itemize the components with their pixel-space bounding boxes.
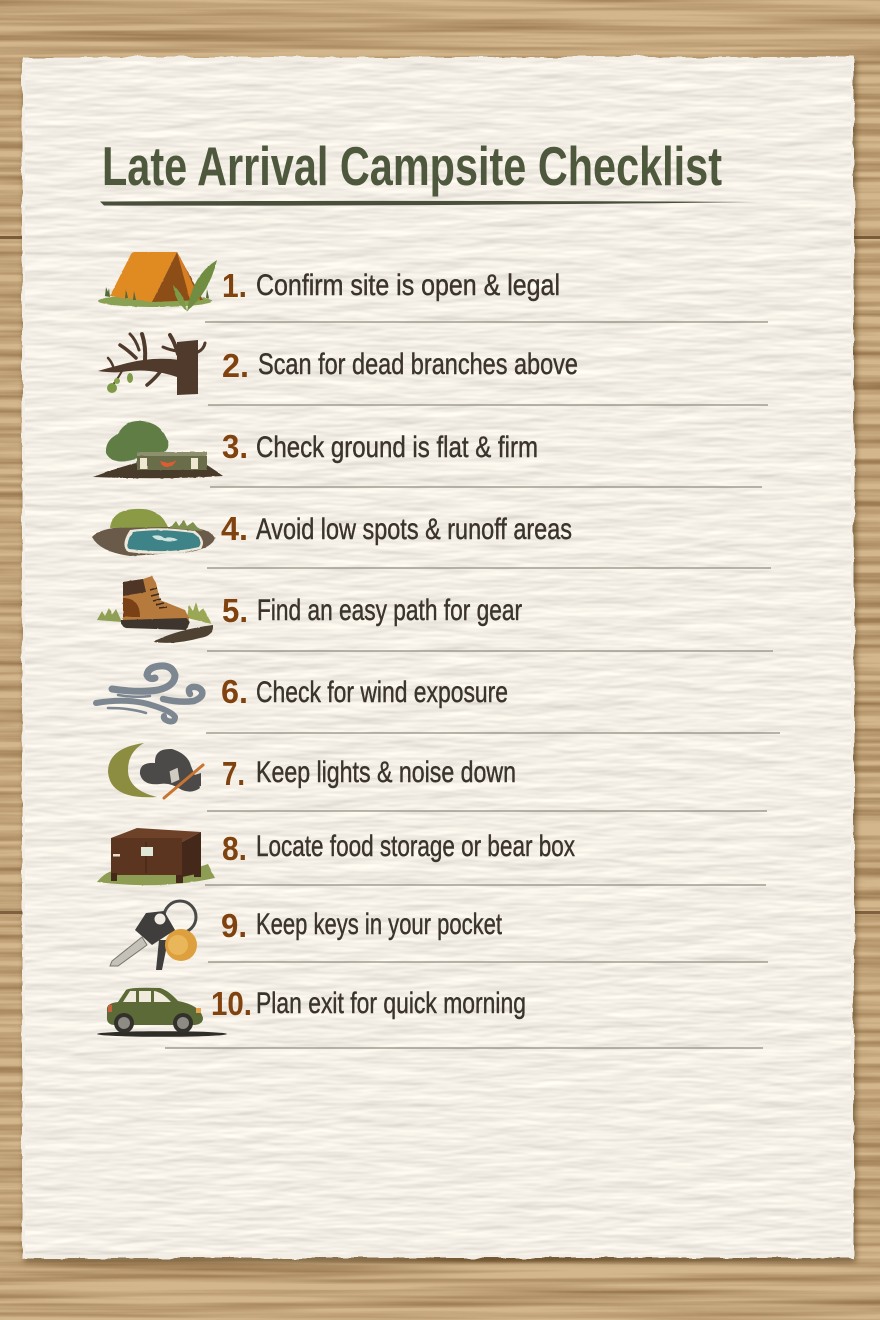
icon: tent bbox=[98, 252, 217, 311]
number 9: 9. bbox=[221, 907, 247, 944]
icon: tree and flat ground bbox=[93, 421, 223, 478]
icon: pond bbox=[92, 509, 215, 556]
label 9: Keep keys in your pocket bbox=[256, 908, 502, 941]
number 2: 2. bbox=[222, 347, 249, 384]
number 3: 3. bbox=[222, 428, 248, 465]
item 3: flat ground bbox=[93, 421, 538, 478]
title underline bbox=[100, 201, 758, 206]
number 6: 6. bbox=[221, 673, 248, 710]
icon: wind swirls bbox=[96, 666, 202, 722]
label 2: Scan for dead branches above bbox=[258, 348, 578, 381]
label 10: Plan exit for quick morning bbox=[256, 987, 526, 1020]
label 4: Avoid low spots & runoff areas bbox=[256, 513, 572, 546]
icon: bear box bbox=[97, 828, 215, 885]
label 6: Check for wind exposure bbox=[256, 676, 508, 709]
item 7: lights and noise bbox=[108, 743, 516, 798]
item 1: confirm site bbox=[98, 252, 560, 311]
item 5: gear path bbox=[97, 576, 522, 643]
item 4: low spots bbox=[92, 509, 572, 556]
number 5: 5. bbox=[222, 592, 248, 629]
number 8: 8. bbox=[222, 830, 247, 867]
icon: dead branch bbox=[98, 334, 205, 395]
item 8: food storage bbox=[97, 828, 575, 885]
item 9: keys bbox=[110, 901, 502, 970]
item 2: dead branches bbox=[98, 334, 578, 395]
icon: crescent moon and covered lantern bbox=[108, 743, 203, 798]
label 1: Confirm site is open & legal bbox=[256, 269, 560, 302]
label 5: Find an easy path for gear bbox=[257, 594, 522, 627]
label 8: Locate food storage or bear box bbox=[256, 830, 575, 863]
number 7: 7. bbox=[222, 755, 245, 792]
label 3: Check ground is flat & firm bbox=[256, 431, 538, 464]
icon: car keys bbox=[110, 901, 197, 970]
number 1: 1. bbox=[222, 267, 247, 304]
number 4: 4. bbox=[221, 510, 248, 547]
icon: hiking boot bbox=[97, 576, 213, 643]
item 6: wind bbox=[96, 666, 508, 722]
icon: green car bbox=[97, 988, 227, 1037]
label 7: Keep lights & noise down bbox=[256, 756, 516, 789]
number 10: 10. bbox=[211, 985, 252, 1022]
item 10: exit plan bbox=[97, 985, 526, 1037]
